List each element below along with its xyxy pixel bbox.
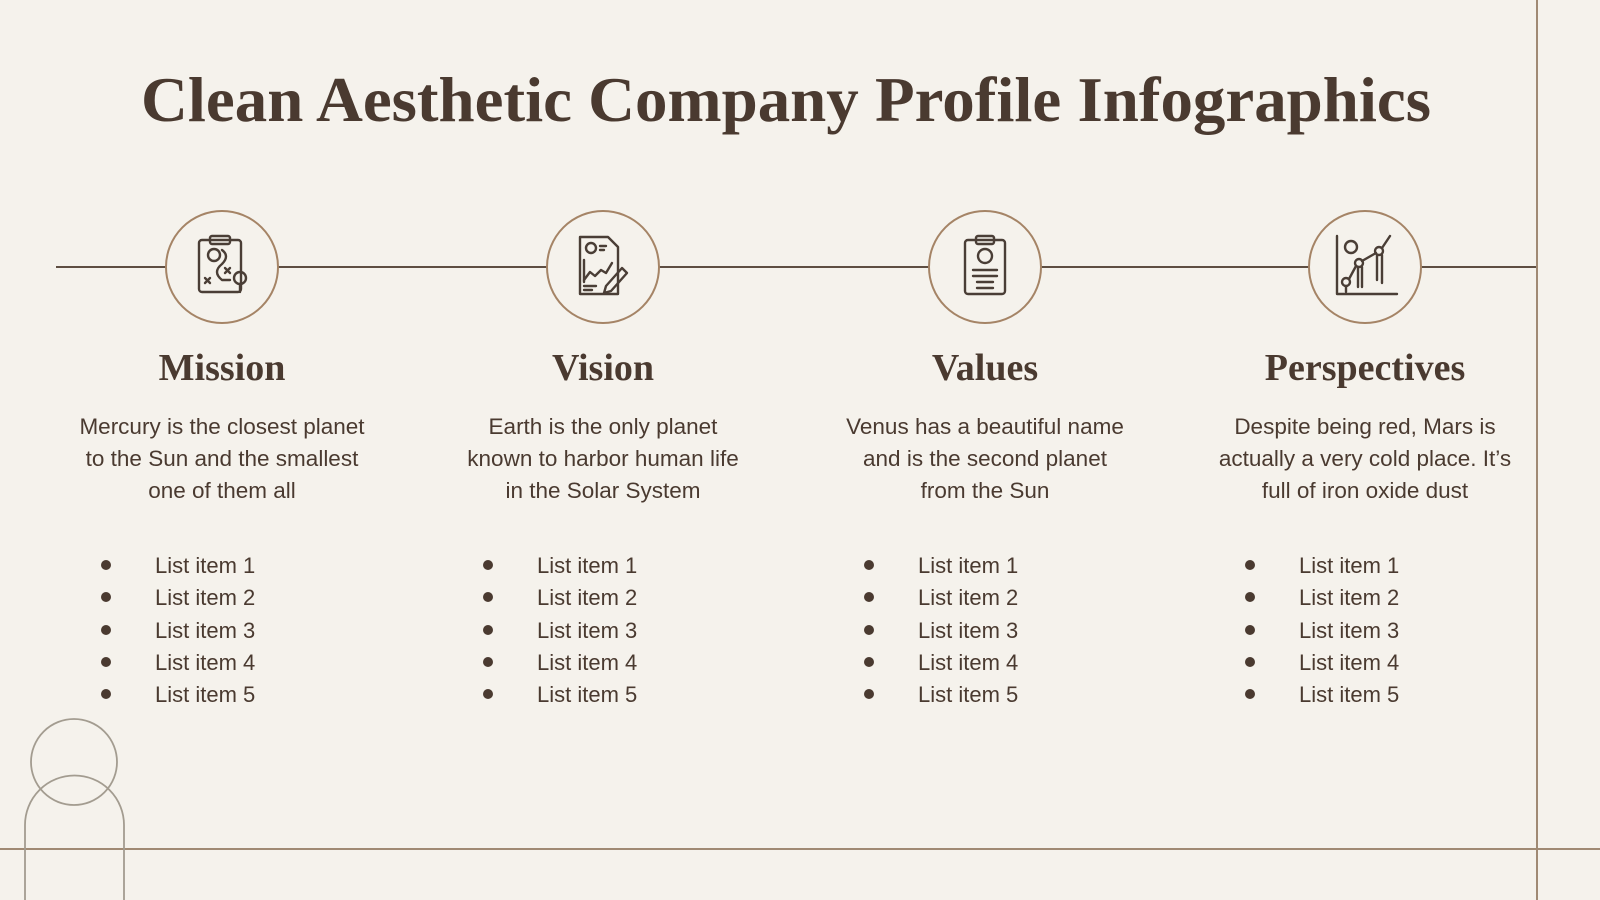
heading: vision: Vision: [552, 347, 654, 389]
heading: perspectives: Perspectives: [1265, 347, 1465, 389]
panel: perspectives: [1219, 211, 1511, 707]
heading: values: Values: [932, 347, 1038, 389]
text: mission description: Mercury is the closest planet: [79, 414, 365, 439]
list: vision: List item 4: [537, 650, 637, 675]
icon: clipboard dollar: [929, 211, 1041, 323]
title: Clean Aesthetic Company Profile Infographics: [141, 64, 1431, 135]
list: perspectives: List item 4: [1299, 650, 1399, 675]
text: values description: from the Sun: [921, 478, 1049, 503]
list: mission: List item 3: [155, 618, 255, 643]
list: values: List item 5: [918, 682, 1018, 707]
list: values: List item 2: [918, 585, 1018, 610]
panel: mission: [79, 211, 365, 707]
text: mission description: to the Sun and the smallest: [86, 446, 359, 471]
heading: mission: Mission: [159, 347, 285, 389]
icon: growth chart: [1309, 211, 1421, 323]
list: values: List item 3: [918, 618, 1018, 643]
list: perspectives: [1245, 553, 1399, 707]
list: vision: List item 5: [537, 682, 637, 707]
list: perspectives: List item 5: [1299, 682, 1399, 707]
text: values description: Venus has a beautiful name: [846, 414, 1124, 439]
text: vision description: in the Solar System: [505, 478, 701, 503]
text: vision description: known to harbor human life: [467, 446, 739, 471]
panel: vision: [467, 211, 739, 707]
text: perspectives description: Despite being red, Mars is: [1234, 414, 1496, 439]
list: mission: List item 5: [155, 682, 255, 707]
list: perspectives: List item 2: [1299, 585, 1399, 610]
list: perspectives: List item 1: [1299, 553, 1399, 578]
list: mission: List item 4: [155, 650, 255, 675]
list: mission: List item 2: [155, 585, 255, 610]
text: perspectives description: full of iron oxide dust: [1262, 478, 1469, 503]
list: mission: [101, 553, 255, 707]
list: vision: [483, 553, 637, 707]
text: mission description: one of them all: [148, 478, 296, 503]
list: perspectives: List item 3: [1299, 618, 1399, 643]
list: vision: List item 1: [537, 553, 637, 578]
panel: values: [846, 211, 1124, 707]
text: perspectives description: actually a very cold place. It’s: [1219, 446, 1511, 471]
icon: clipboard map: [166, 211, 278, 323]
text: values description: and is the second planet: [863, 446, 1108, 471]
list: vision: List item 3: [537, 618, 637, 643]
text: vision description: Earth is the only planet: [489, 414, 718, 439]
decoration: circle and arch: [25, 719, 124, 900]
list: values: List item 4: [918, 650, 1018, 675]
list: values: List item 1: [918, 553, 1018, 578]
list: values: [864, 553, 1018, 707]
list: vision: List item 2: [537, 585, 637, 610]
icon: document chart: [547, 211, 659, 323]
list: mission: List item 1: [155, 553, 255, 578]
